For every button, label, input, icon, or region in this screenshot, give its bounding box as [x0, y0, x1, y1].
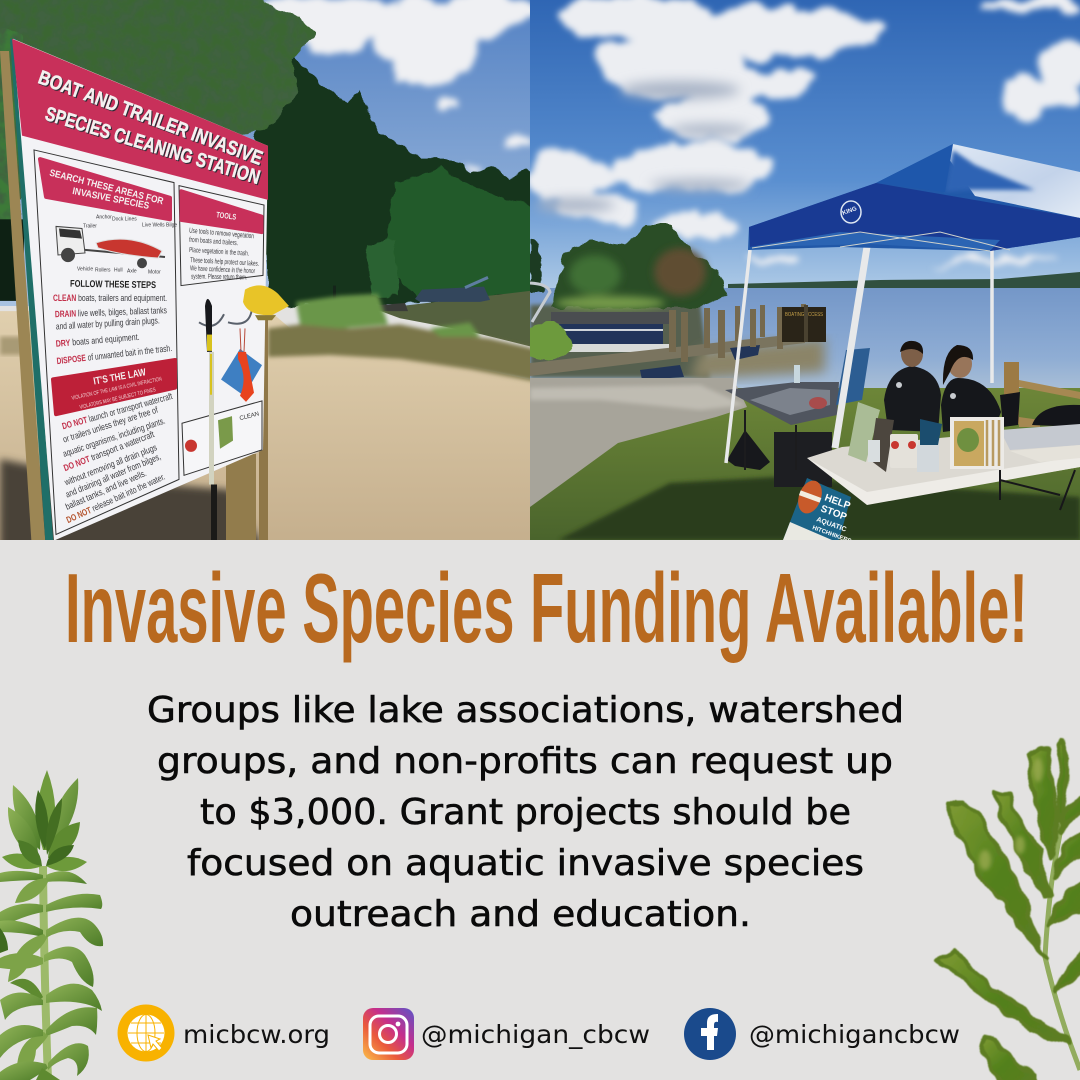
instagram link — [363, 1008, 650, 1060]
sign posts — [0, 51, 268, 551]
follow these steps list: DRY boats and equipment. — [55, 332, 140, 349]
grass lawn — [530, 388, 1080, 540]
help stop sign — [783, 477, 852, 545]
distant hill — [728, 272, 1080, 288]
lawn shadow — [558, 477, 1080, 540]
do not list: or trailers unless they are free of — [62, 405, 159, 445]
shoreline grass — [268, 294, 535, 381]
do not list: and draining all water from bilges, — [64, 451, 162, 500]
sign title: BOAT AND TRAILER INVASIVE — [35, 66, 265, 170]
follow these steps list: DISPOSE of unwanted bait in the trash. — [56, 343, 172, 366]
it's the law banner: VIOLATION OF THE LAW IS A CIVIL INFRACTION — [71, 376, 162, 402]
follow these steps list: and all water by pulling drain plugs. — [56, 315, 160, 331]
body text: Groups like lake associations, watershed — [147, 690, 904, 731]
blue sponge and red scraper — [221, 349, 262, 396]
shadow on sand — [0, 459, 260, 551]
follow these steps list — [53, 279, 172, 366]
facebook handle: @michigancbcw — [749, 1020, 960, 1049]
body text: groups, and non-profits can request up — [157, 741, 893, 782]
follow these steps list: CLEAN boats, trailers and equipment. — [53, 293, 167, 303]
sky and clouds — [0, 0, 535, 306]
boat and trailer diagram: Dock Lines — [112, 216, 137, 222]
sky — [530, 0, 1080, 300]
boat and trailer diagram: Trailer — [83, 223, 97, 229]
tools panel: We have confidence in the honor — [190, 265, 256, 275]
logo strip: CLEAN — [239, 411, 260, 422]
red banner — [12, 39, 268, 200]
do not list: DO NOT release bait into the water. — [65, 471, 167, 525]
volunteers — [884, 341, 1001, 432]
help stop sign: STOP — [819, 503, 848, 523]
moored pontoon boat — [520, 283, 669, 361]
brochures on the table — [848, 402, 942, 472]
boat and trailer diagram: Anchor — [96, 214, 112, 220]
follow these steps list: DRAIN live wells, bilges, ballast tanks — [55, 305, 167, 319]
booklet display — [950, 417, 1004, 469]
photo: outreach booth beside the lake — [520, 0, 1080, 545]
photo: boat cleaning station on the beach — [0, 0, 540, 551]
dock information board: BOATING ACCESS — [785, 312, 824, 318]
body text: focused on aquatic invasive species — [187, 843, 864, 884]
forest — [0, 0, 540, 306]
website text: micbcw.org — [183, 1020, 330, 1049]
do not list: without removing all drain plugs — [62, 442, 159, 488]
body text — [147, 690, 904, 935]
dock — [530, 304, 826, 380]
volunteer left — [884, 341, 941, 432]
search panel: SEARCH THESE AREAS FOR — [48, 168, 164, 207]
tools panel: These tools help protect our lakes. — [190, 257, 259, 268]
boat and trailer diagram: Rollers — [95, 267, 111, 273]
canopy tent — [726, 144, 1080, 463]
decorative plant: left milfoil stalk — [0, 770, 103, 1080]
canopy tent: KING — [842, 206, 858, 217]
icon: globe with cursor — [118, 1004, 174, 1062]
lake water and boats — [333, 277, 540, 349]
cleaning tools on hooks — [199, 285, 289, 551]
help stop sign: HITCHHIKERS — [811, 525, 852, 545]
boat and trailer diagram: Hull — [114, 267, 123, 273]
body text: outreach and education. — [290, 894, 751, 935]
help stop sign: AQUATIC — [815, 516, 847, 534]
yellow sponge — [243, 285, 289, 315]
large pine at upper left — [0, 0, 316, 222]
body text: to $3,000. Grant projects should be — [200, 792, 851, 833]
sign board — [10, 39, 268, 551]
tools panel: Place vegetation in the trash. — [189, 247, 249, 258]
logo strip — [182, 401, 262, 475]
help stop sign: HELP — [823, 492, 852, 512]
tools panel: TOOLS — [216, 210, 237, 222]
fence — [1004, 362, 1080, 427]
boat and trailer diagram: Motor — [148, 269, 161, 275]
it's the law banner: VIOLATORS MAY BE SUBJECT TO FINES — [79, 387, 157, 411]
beach sand — [0, 311, 530, 551]
tools panel — [179, 186, 264, 286]
decorative plant: right curly pondweed — [937, 740, 1080, 1080]
shaded storage bin and bag — [727, 430, 832, 487]
front table — [807, 424, 1080, 510]
do not list: DO NOT launch or transport watercraft — [61, 391, 174, 431]
do not list — [61, 391, 174, 525]
boat and trailer diagram: Vehicle — [77, 266, 93, 272]
icon: facebook — [684, 1008, 736, 1060]
do not list: aquatic organisms, including plants. — [62, 416, 166, 459]
dock information board — [782, 305, 826, 342]
tools panel: from boats and trailers. — [189, 237, 238, 247]
search panel — [34, 150, 179, 534]
website link — [118, 1004, 330, 1062]
search panel: INVASIVE SPECIES — [71, 186, 151, 212]
boat and trailer diagram — [56, 214, 177, 275]
boat and trailer diagram: Axle — [127, 268, 137, 274]
concrete boat ramp — [530, 378, 747, 507]
volunteer right — [941, 345, 1001, 432]
lake — [530, 288, 1080, 388]
facebook link — [684, 1008, 960, 1060]
tools panel: Use tools to remove vegetation — [189, 228, 254, 240]
near-shore reflection — [530, 300, 710, 378]
follow these steps list: FOLLOW THESE STEPS — [70, 279, 157, 291]
folding chairs — [1000, 392, 1080, 427]
instagram handle: @michigan_cbcw — [421, 1020, 650, 1049]
tools panel: system. Please return them. — [191, 273, 247, 281]
icon: instagram — [363, 1008, 414, 1060]
it's the law banner — [53, 360, 175, 414]
shoreline trees — [530, 225, 728, 310]
it's the law banner: IT'S THE LAW — [93, 367, 147, 388]
lower gray panel — [0, 540, 1080, 1080]
sign title: SPECIES CLEANING STATION — [43, 103, 263, 189]
do not list: DO NOT transport a watercraft — [62, 429, 156, 473]
clouds — [526, 0, 1080, 264]
boat and trailer diagram: Live Wells Bilge — [142, 222, 177, 228]
do not list: ballast tanks, and live wells. — [64, 468, 148, 512]
back table — [725, 365, 839, 470]
brochure rack — [836, 348, 870, 405]
